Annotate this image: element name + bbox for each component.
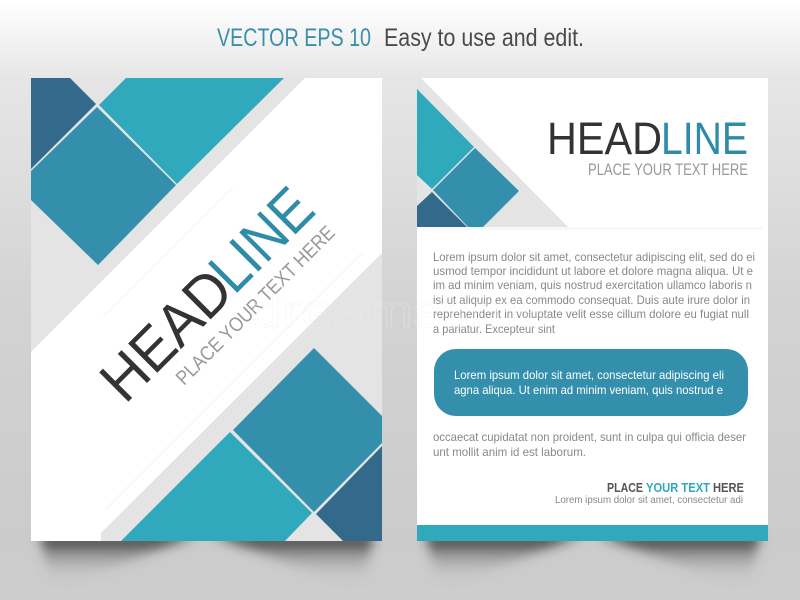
- cover subheading: PLACE YOUR TEXT HERE: [172, 222, 340, 390]
- page headline: LINE: [661, 113, 748, 164]
- callout: [434, 349, 748, 416]
- cover headline: HEAD: [87, 256, 245, 414]
- title: [217, 24, 584, 52]
- footer text: Lorem ipsum dolor sit amet, consectetur adi: [555, 494, 743, 506]
- body text: isi ut aliquip ex ea commodo consequat. Duis aute irure dolor in: [433, 293, 750, 307]
- page headline: HEAD: [547, 113, 662, 164]
- gray triangle: [417, 78, 568, 227]
- shape: bottom light square: [121, 432, 312, 541]
- shape: light square: [417, 89, 474, 189]
- footer heading: PLACE: [607, 481, 643, 495]
- callout: agna aliqua. Ut enim ad minim veniam, quis nostrud e: [454, 383, 723, 397]
- header shadow line: [417, 227, 762, 230]
- lower body text: [434, 432, 746, 456]
- body text: usmod tempor incididunt ut labore et dolore magna aliqua. Ut e: [433, 264, 753, 278]
- callout: Lorem ipsum dolor sit amet, consectetur adipiscing eli: [454, 368, 724, 382]
- panel: inner page: [417, 78, 768, 541]
- footer heading: HERE: [713, 481, 744, 495]
- footer heading: YOUR TEXT: [646, 481, 710, 495]
- title: Easy to use and edit.: [384, 24, 584, 52]
- body text: a pariatur. Excepteur sint: [433, 322, 556, 336]
- shape: bottom dark square: [316, 446, 382, 541]
- panel: cover page: [31, 78, 382, 541]
- body text: reprehenderit in voluptate velit esse cillum dolore eu fugiat null: [433, 307, 749, 321]
- lower body text: occaecat cupidatat non proident, sunt in culpa qui officia deser: [433, 430, 746, 444]
- shape: top light square: [99, 78, 284, 184]
- shape: top mid square: [31, 107, 176, 265]
- shape: top dark square: [31, 78, 96, 169]
- shape: mid square: [433, 148, 519, 227]
- white diagonal band: [31, 78, 382, 541]
- body text: Lorem ipsum dolor sit amet, consectetur adipiscing elit, sed do ei: [433, 250, 755, 264]
- watermark: dreamstime: [250, 285, 550, 337]
- footer heading: [608, 483, 744, 492]
- cover headline: [99, 186, 316, 402]
- body text: im ad minim veniam, quis nostrud exercitation ullamco laboris n: [433, 278, 752, 292]
- lower body text: unt mollit anim id est laborum.: [433, 445, 586, 459]
- title: VECTOR EPS 10: [217, 24, 371, 52]
- page subheading: PLACE YOUR TEXT HERE: [588, 160, 748, 179]
- footer bar: [417, 525, 768, 541]
- body text: [433, 250, 755, 336]
- page headline: [550, 122, 746, 154]
- cover headline: LINE: [196, 174, 327, 305]
- shape: dark square: [417, 192, 467, 227]
- shadow: right page: [426, 535, 760, 590]
- shape: bottom mid square: [233, 348, 382, 512]
- shadow: left page: [40, 535, 374, 590]
